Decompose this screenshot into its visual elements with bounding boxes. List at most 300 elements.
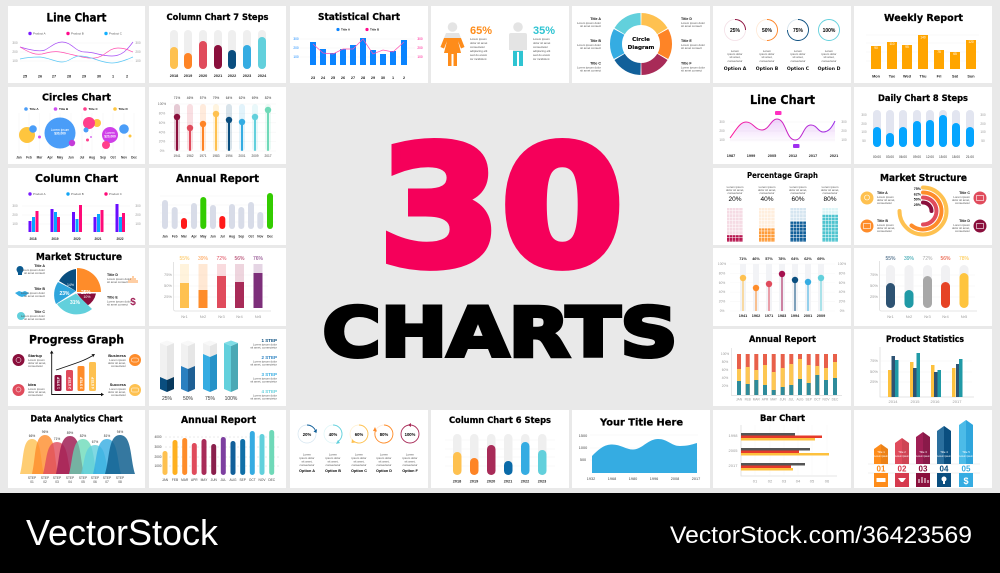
icons and text left [12,353,46,397]
axis labels: 27 [52,74,56,78]
column chart: 2022 [228,74,236,78]
pill bar chart: 50% [870,283,878,288]
slider chart: 80% [719,272,725,276]
icons and text right: Title C [959,191,970,195]
panel: data analytics chart [8,410,145,488]
step labels: sit amet, consectetur [250,380,277,384]
bell chart: 06 [93,480,97,484]
bell chart: STEP [28,476,36,480]
labels left: sit amet consect [580,46,601,50]
bar and line chart: 29 [371,76,375,80]
heading: column chart 7 steps: Column Chart 7 Steps [166,13,268,23]
pill bar chart: Aug [229,234,235,238]
slider chart: 64% [791,257,799,261]
slider chart: 2017 [264,154,272,158]
area line chart: 300 [719,120,725,124]
heading: column chart: Column Chart [35,172,118,185]
column chart: 2020 [199,74,207,78]
area chart: 1000 [579,446,587,450]
icons and text right: Success [110,382,127,387]
panel: slider chart 7 items [713,248,851,326]
bell chart: 07 [105,480,109,484]
slider chart: 1983 [778,314,786,318]
labels left: Lorem ipsum dolor [577,21,601,25]
option D 100%: 100% [823,28,836,34]
option C 60%: Option C [351,469,367,473]
option A 25%: Lorem [731,49,740,53]
bar chart: 95 [905,45,909,49]
bubble chart: Nov [121,156,127,160]
heading: line chart: Line Chart [750,93,815,107]
labels right [681,17,705,72]
slider chart: 57% [765,257,773,261]
waffle chart 80% [821,185,839,242]
bar and line chart: 28 [361,76,365,80]
bar chart: 65 [953,52,957,56]
pill bar chart: Jul [220,234,225,238]
slider chart: 60% [839,281,845,285]
slider chart: 71% [174,96,180,100]
bubble chart: Dec [131,156,137,160]
arrow 05: Lorem ipsum [959,455,973,458]
option C 60%: 60% [355,432,363,437]
isometric bar chart [160,340,238,402]
labels left: Title B [590,39,601,43]
slider chart: 2001 [238,154,246,158]
waffle chart 40%: 40% [760,196,774,203]
slider chart: 0% [160,149,164,153]
option B 50%: sit amet, [762,55,773,59]
horizontal bar chart [729,425,837,484]
slider chart: 82% [265,96,271,100]
heading: percentage graph: Percentage Graph [747,171,818,180]
option C 75%: sit amet, [793,55,804,59]
growth chart with arrows: 1 STEP [56,376,60,389]
labels and icons right: Lorem ipsum dolor [107,277,131,281]
labels right: Title D [681,17,692,21]
slider chart: 1962 [186,154,194,158]
slider chart: 2001 [804,314,812,318]
grouped column chart: 2018 [29,237,37,241]
option D 80%: Option D [376,469,392,473]
bell chart: STEP [116,476,124,480]
waffle chart 80%: consectetur [823,191,838,195]
labels and icons left: Title A [34,264,45,268]
area chart: 500 [580,458,586,462]
stacked column chart: 80% [722,360,728,364]
panel: line chart [8,6,145,83]
stacked column chart: JUL [788,398,794,402]
labels and icons right: Title D [107,273,118,277]
panel: market structure pie [8,248,145,326]
stacked column chart: 40% [722,376,728,380]
option B 40%: sit amet, [328,460,339,464]
horizontal bar chart: 03 [782,478,787,484]
bell chart: 08 [118,480,122,484]
slider chart: 57% [200,96,206,100]
axis labels: 30 [97,74,101,78]
labels and icons left: Title C [34,310,45,314]
area line chart: 200 [841,129,847,133]
option D 100%: Lorem [825,49,834,53]
text: 35%: 35% [533,25,555,37]
bell chart [20,430,135,484]
grouped column chart: 2021 [94,237,102,241]
pill bar chart: 55% [885,256,896,262]
panel: your title here [572,410,710,488]
bar chart: 25% [164,294,172,299]
option D 100%: ipsum dolor [822,52,837,56]
pill bar chart: 100 [980,130,986,134]
bell chart: 89% [67,431,73,435]
option B 50%: 50% [762,28,773,34]
icons and text left: Idea [28,382,37,387]
slider chart: 40% [719,290,725,294]
radial labels [914,187,922,207]
heading: charts: CHARTS [322,294,678,373]
bar and line chart: 200 [417,46,423,50]
panel: column chart [8,168,145,245]
stacked column chart: NOV [823,398,830,402]
bar and line chart: 2 [403,76,405,80]
step labels: Lorem ipsum dolor [253,342,277,346]
bar chart [866,35,979,78]
panel: market structure radial [854,168,992,245]
bar and line chart: 24 [321,76,326,80]
axis labels: 300 [135,41,141,45]
pill bar chart: 75% [870,272,878,277]
horizontal bar chart: 1998 [729,433,738,438]
slider chart: 46% [752,257,760,261]
pill bar chart: 200 [980,122,986,126]
option B 50% [756,20,779,72]
option A 25% [724,20,747,72]
panel: 3d bars [149,329,286,406]
grouped column chart [12,204,141,241]
heading: line chart: Line Chart [46,10,107,24]
bar chart: 56% [234,256,245,262]
pie chart: 31% [70,300,81,306]
step labels: Lorem ipsum dolor [253,394,277,398]
pill bar chart: Nr4 [942,314,949,319]
slider chart: 69% [252,96,258,100]
area line chart: 2005 [768,154,776,158]
rainbow column chart: JUN [211,478,217,482]
bell chart: 01 [30,480,34,484]
bell chart: 94% [117,430,123,434]
option D 100% [818,20,841,72]
pill bar chart: 18:00 [952,155,960,159]
slider chart: 1941 [739,314,747,318]
pill bar chart: Nr3 [924,314,931,319]
horizontal bar chart: 06 [825,478,830,484]
icons and text left: consectetur [877,229,892,233]
growth chart with arrows [50,350,104,396]
panel: circle diagram [572,6,710,83]
stacked column chart: MAR [753,398,761,402]
icons and text left: Lorem ipsum [877,195,894,199]
option C 75% [787,20,810,72]
bubble chart [16,113,137,160]
icon: woman figure 65% [440,22,464,66]
heading: circles chart: Circles Chart [42,92,111,104]
pill bar chart: 25% [870,294,878,299]
axis labels: 300 [12,41,18,45]
slider chart: 71% [739,257,747,261]
slider chart: 1983 [212,154,220,158]
labels left: Lorem ipsum dolor [577,66,601,70]
rainbow column chart: APR [191,478,198,482]
panel: annual report stacked [713,329,851,406]
slider chart: 2009 [251,154,259,158]
waffle chart 60%: 60% [791,196,805,203]
option F 100%: ipsum dolor [403,456,418,460]
bubble chart: Aug [89,156,95,160]
bubble chart: Feb [26,156,32,160]
heading: 30: 30 [378,112,624,304]
legend: Title A [341,28,351,32]
grouped column chart: 300 [12,204,18,208]
isometric bar chart: 100% [225,396,238,402]
area chart: 1500 [579,434,587,438]
bell chart: 67% [92,440,98,444]
step labels: sit amet, consectetur [250,362,277,366]
axis labels: 1 [112,74,114,78]
icons and text left: dolor sit amet, [28,361,46,365]
option F 100%: Option F [402,469,418,473]
pill bar chart: 300 [861,113,867,117]
column chart: 2023 [538,480,546,484]
legend [24,107,128,111]
axis labels: 28 [67,74,71,78]
option B 40%: Lorem [329,452,338,456]
bar and line chart: 23 [311,76,315,80]
pie chart: 10% [83,295,91,299]
pill bar chart: 56% [940,256,951,262]
waffle chart 60%: Lorem ipsum [790,185,807,189]
slider chart: 62% [239,96,245,100]
bell chart: 81% [104,434,110,438]
panel: bar chart [713,410,851,488]
grouped column chart: 200 [12,213,18,217]
labels right: sit amet consect [681,24,702,28]
column chart: 2021 [504,480,512,484]
bell chart: STEP [91,476,99,480]
bar chart: 110 [889,42,895,46]
labels and icons left [15,264,45,321]
icons and text right: consectetur [111,364,126,368]
slider chart: 1971 [199,154,207,158]
rainbow column chart: FEB [172,478,178,482]
bell chart: 82% [80,434,86,438]
bar and line chart: 100 [417,55,423,59]
pill bar chart: Sep [238,234,244,238]
heading: your title here: Your Title Here [599,418,683,428]
horizontal bar chart: 04 [796,478,801,484]
text: 35%: sed do eiusm [533,53,551,57]
stacked column chart: APR [762,398,769,402]
arrow 02: 02 [898,464,907,474]
bar chart: Mon [872,74,881,78]
waffle chart 40%: consectetur [760,191,775,195]
bar chart: 72% [216,256,227,262]
icons and text left: Startup [28,353,43,358]
icons and text right: dolor sit amet, [108,361,126,365]
rainbow column chart: 4000 [154,435,162,439]
waffle chart 20%: dolor sit amet, [726,188,744,192]
slider chart: 1941 [173,154,181,158]
option F 100% [401,423,419,473]
heading: annual report: Annual Report [181,415,256,426]
option D 100%: Option D [818,66,841,72]
arrow 01: Lorem ipsum [874,455,888,458]
arrow 03: Lorem ipsum [916,455,930,458]
grouped column chart: 50% [870,369,878,374]
slider chart: 1994 [791,314,800,318]
option A 25%: 25% [730,28,741,34]
rainbow column chart: NOV [259,478,266,482]
bar chart: Nr1 [181,314,188,319]
arrow 03: Title 3 [919,450,927,454]
labels right: Lorem ipsum dolor [681,66,705,70]
icons and text left: consectetur [28,364,43,368]
labels and icons right [107,273,137,308]
labels right: Title E [681,39,692,43]
area line chart: 2021 [830,154,838,158]
option A 20%: Lorem [303,452,312,456]
icons and text left: Lorem ipsum [28,387,45,391]
footer logo: VectorStock [26,512,219,553]
labels and icons left: sit amet consect [24,271,45,275]
axis labels [12,41,141,78]
panel: percentage options [713,6,851,83]
growth chart with arrows: 3 STEP [80,376,84,389]
horizontal bar chart: 01 [753,478,758,484]
option B 40%: Option B [325,469,341,473]
icons and text right: Title D [959,219,970,223]
arrow 02: Lorem ipsum [895,455,909,458]
slider chart: 64% [226,96,232,100]
area line chart: 100 [841,138,847,142]
slider chart: 60% [719,281,725,285]
icon: man figure 35% [509,22,527,66]
slider chart: 79% [213,96,219,100]
pill bar chart: 100 [861,130,867,134]
icons and text right [108,353,141,397]
pill bar chart: 21:00 [966,155,974,159]
bell chart: STEP [53,476,61,480]
horizontal bar chart: 05 [810,478,815,484]
bell chart: STEP [41,476,49,480]
option B 40%: consectetur [326,463,341,467]
icons and text left: dolor sit amet, [877,198,895,202]
step labels: sit amet, consectetur [250,396,277,400]
slider chart: 40% [159,130,165,134]
bubble chart: Lorem ipsum [51,128,70,132]
pill bar chart: 300 [980,113,986,117]
labels left [577,17,601,72]
bubble chart: May [57,156,63,160]
legend: products: Product A [33,32,46,36]
grouped column chart: 2015 [911,399,920,404]
area line chart: 100 [719,138,725,142]
pie chart: 14% [67,283,74,287]
slider chart: 20% [719,300,725,304]
axis labels: 29 [82,74,86,78]
option F 100%: Lorem [406,452,415,456]
option C 60%: ipsum dolor [352,456,367,460]
slider chart [718,257,846,318]
panel: column chart 6 steps [431,410,569,488]
pill bar chart: Mar [181,234,188,238]
axis labels: 2 [126,74,128,78]
bell chart: 71% [54,437,60,441]
heading: weekly report: Weekly Report [884,13,963,24]
bar chart: 120 [968,40,974,44]
horizontal bar chart: 2017 [729,463,738,468]
option C 75%: 75% [793,28,804,34]
bar and line chart: 300 [293,37,299,41]
rainbow column chart: MAR [181,478,189,482]
bell chart: 03 [55,480,59,484]
arrow 04: Title 4 [940,450,948,454]
labels right: Title F [681,62,692,66]
pill bar chart [160,193,276,238]
stacked column chart: DEC [832,398,839,402]
grouped column chart: 2016 [931,399,940,404]
text: 35%: dolor sit amet [533,41,551,45]
column chart: 2023 [243,74,251,78]
bubble chart: Mar [37,156,43,160]
heading: progress graph: Progress Graph [29,332,124,346]
column chart: 2018 [170,74,178,78]
icons and text right: consectetur [955,229,970,233]
text: 65%: sed do eiusm [470,53,488,57]
pill bar chart: 200 [861,122,867,126]
slider chart: 78% [778,257,786,261]
step labels: sit amet, consectetur [250,346,277,350]
waffle chart 60% [789,185,807,242]
waffle chart 20%: 20% [728,196,742,203]
panel: column chart 7 steps [149,6,286,83]
text: 65%: Lorem ipsum [470,37,487,41]
slider chart: 2009 [817,314,825,318]
bell chart: 96% [42,430,48,434]
panel: statistical chart [290,6,428,83]
area line chart: 2012 [789,154,797,158]
option A 20%: Option A [299,469,315,473]
bar and line chart: 200 [293,46,299,50]
labels right: Lorem ipsum dolor [681,21,705,25]
bell chart: 66% [29,434,35,438]
waffle chart 20%: Lorem ipsum [727,185,744,189]
waffle chart 80%: dolor sit amet, [821,188,839,192]
grouped column chart [870,347,974,404]
bell chart: STEP [66,476,74,480]
area chart: 1932 [587,477,595,481]
bubble chart: $20,000 [104,134,116,138]
grouped column chart: 2017 [953,399,962,404]
step labels [250,338,277,400]
bar chart: 39% [198,256,209,262]
pill bar chart: Oct [248,234,255,238]
stacked column chart: AUG [797,398,804,402]
option B 50%: ipsum dolor [760,52,775,56]
slider chart: 1971 [765,314,773,318]
column chart: 2020 [487,480,495,484]
bell chart: 04 [68,480,72,484]
option D 100%: sit amet, [824,55,835,59]
